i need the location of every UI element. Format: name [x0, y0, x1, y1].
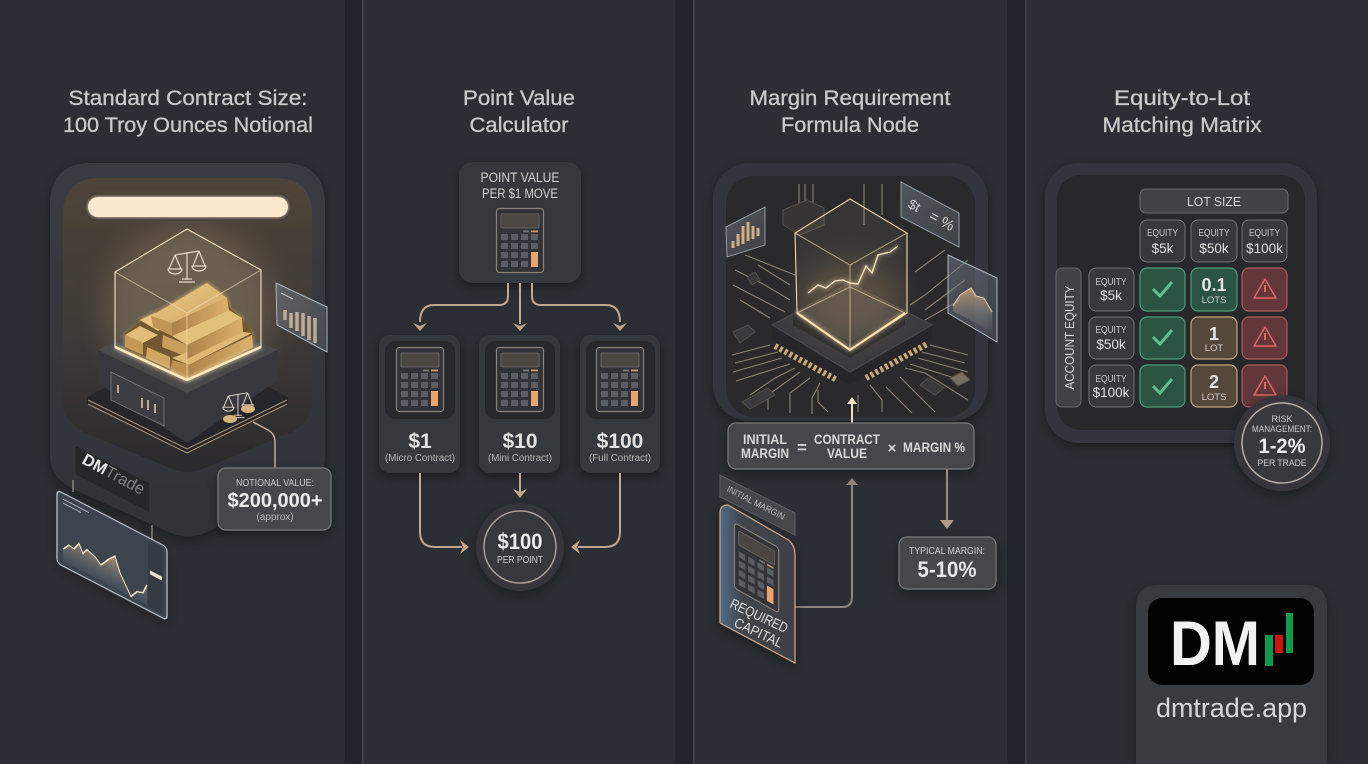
card: full contract: [580, 335, 660, 473]
light bar: [84, 193, 292, 221]
DMTrade nameplate: DMTrade: [79, 451, 148, 499]
chart hangers: [73, 480, 152, 540]
heading: margin requirement: [750, 87, 951, 137]
glass bar chart tooltip: [276, 283, 327, 352]
heading: matrix: Matching Matrix: [1102, 114, 1262, 137]
required capital card: REQUIRED: [728, 595, 791, 636]
green check cells: [1140, 268, 1185, 407]
glass ratio card: = %: [926, 208, 957, 235]
risk management badge: MANAGEMENT:: [1252, 424, 1312, 434]
card: mini contract: $10: [502, 430, 538, 453]
source node: POINT VALUE: [480, 170, 560, 185]
formula box: INITIAL: [743, 432, 787, 447]
lot cells: LOTS: [1202, 295, 1226, 306]
lot size header: LOT SIZE: [1187, 194, 1241, 209]
column headers: [1140, 220, 1287, 262]
lot cells: 0.1: [1201, 275, 1227, 295]
formula box: CONTRACT: [814, 432, 881, 447]
heading: point value: [463, 87, 575, 137]
icon: scale in cube: [168, 251, 206, 282]
formula box: =: [797, 438, 807, 457]
row headers: $5k: [1100, 288, 1122, 303]
card: mini contract: (Mini Contract): [488, 453, 552, 464]
circuit traces: [732, 184, 968, 414]
formula box: MARGIN %: [903, 440, 965, 455]
row headers: EQUITY: [1096, 374, 1127, 385]
column gutters: [345, 0, 1026, 764]
risk management badge: RISK: [1271, 414, 1293, 424]
column headers: $5k: [1152, 241, 1174, 256]
row headers: EQUITY: [1096, 277, 1127, 288]
weight readout: [111, 372, 164, 426]
column headers: $100k: [1246, 241, 1283, 256]
row headers: [1089, 268, 1134, 407]
circuit board frame: [713, 163, 988, 421]
glass price chart: [57, 490, 167, 620]
lot cells: 2: [1209, 372, 1219, 392]
callout: typical margin: 5-10%: [918, 557, 976, 582]
processor chip: [772, 283, 932, 385]
lot cells: 1: [1209, 324, 1219, 344]
risk management badge: [1234, 395, 1330, 491]
lot cells: LOT: [1205, 343, 1223, 354]
callout: notional value: NOTIONAL VALUE:: [236, 477, 314, 489]
column headers: EQUITY: [1249, 228, 1280, 239]
heading: matrix: Equity-to-Lot: [1114, 87, 1250, 110]
card: micro contract: (Micro Contract): [385, 453, 455, 464]
icon: calculator: [496, 208, 544, 272]
heading: contract size: Standard Contract Size:: [68, 87, 308, 110]
formula box: ×: [888, 440, 897, 457]
required capital card: CAPITAL: [732, 614, 786, 651]
DMTrade nameplate: [75, 445, 150, 513]
row headers: $100k: [1093, 385, 1130, 400]
panel: standard contract size: [50, 87, 331, 620]
circuit components: [733, 200, 970, 409]
row headers: EQUITY: [1096, 325, 1127, 336]
formula box: [728, 423, 974, 469]
column headers: $50k: [1199, 241, 1229, 256]
card: micro contract: $1: [408, 430, 432, 453]
gold bars: [125, 283, 253, 380]
heading: point value: Calculator: [470, 114, 569, 137]
panel: equity to lot matrix: [1045, 87, 1330, 764]
heading: point value: Point Value: [463, 87, 575, 110]
heading: matrix: [1102, 87, 1262, 137]
formula box: VALUE: [827, 446, 867, 461]
column headers: EQUITY: [1147, 228, 1178, 239]
glass ratio card: [901, 182, 959, 247]
lot cells: LOTS: [1202, 392, 1226, 403]
column headers: EQUITY: [1198, 228, 1230, 239]
initial margin tag: [720, 475, 795, 535]
arrows to contracts: [413, 283, 627, 331]
callout: notional value: $200,000+: [228, 490, 322, 512]
account equity label: [1056, 268, 1081, 407]
row headers: $50k: [1096, 337, 1126, 352]
panel: point value calculator: [379, 87, 660, 591]
source node: [459, 162, 581, 283]
logo: DM: [1170, 609, 1260, 679]
card: full contract: $100: [597, 430, 643, 453]
heading: contract size: 100 Troy Ounces Notional: [63, 114, 313, 137]
card: full contract: (Full Contract): [589, 453, 651, 464]
logo: [1148, 598, 1314, 685]
callout: notional value: [218, 468, 331, 530]
arrows to result: [420, 473, 620, 554]
heading: margin requirement: Margin Requirement: [750, 87, 951, 110]
heading: margin requirement: Formula Node: [781, 114, 919, 137]
lot cells: [1191, 268, 1237, 407]
arrow up to chip: [847, 397, 857, 423]
risk management badge: PER TRADE: [1258, 458, 1306, 469]
platform: [87, 305, 288, 454]
initial margin tag: INITIAL MARGIN: [725, 484, 787, 522]
gold vault housing: [50, 163, 325, 536]
callout: notional value: (approx): [256, 512, 294, 523]
callout: typical margin: [899, 537, 996, 589]
red warning cells: [1242, 268, 1287, 407]
glass area chart card: [948, 255, 997, 342]
result circle: [476, 503, 564, 591]
glass bar chart card: [726, 207, 765, 257]
matrix frame: [1045, 163, 1317, 443]
result circle: PER POINT: [497, 555, 543, 566]
result circle: $100: [498, 529, 542, 554]
callout: typical margin: TYPICAL MARGIN:: [909, 545, 985, 557]
lot size header: [1140, 189, 1288, 213]
glowing glass cube: [795, 199, 907, 350]
card: mini contract: [479, 335, 560, 473]
icon: skewed calculator: [734, 523, 779, 613]
connector to notional value: [253, 422, 275, 468]
account equity label: ACCOUNT EQUITY: [1062, 285, 1077, 390]
source node: PER $1 MOVE: [482, 186, 558, 201]
heading: contract size: [63, 87, 313, 137]
brand card: [1136, 585, 1327, 764]
required capital card: [720, 475, 795, 663]
panel: margin requirement: [713, 87, 997, 663]
icon: small gold scale: [223, 393, 255, 423]
glass cube: [115, 229, 261, 380]
formula box: MARGIN: [741, 446, 789, 461]
arrow from required capital: [795, 478, 858, 607]
card: micro contract: [379, 335, 460, 473]
glass ratio card: $t: [906, 196, 924, 215]
arrow to typical margin: [940, 469, 954, 529]
risk management badge: 1-2%: [1258, 435, 1306, 458]
website url: dmtrade.app: [1156, 693, 1307, 723]
